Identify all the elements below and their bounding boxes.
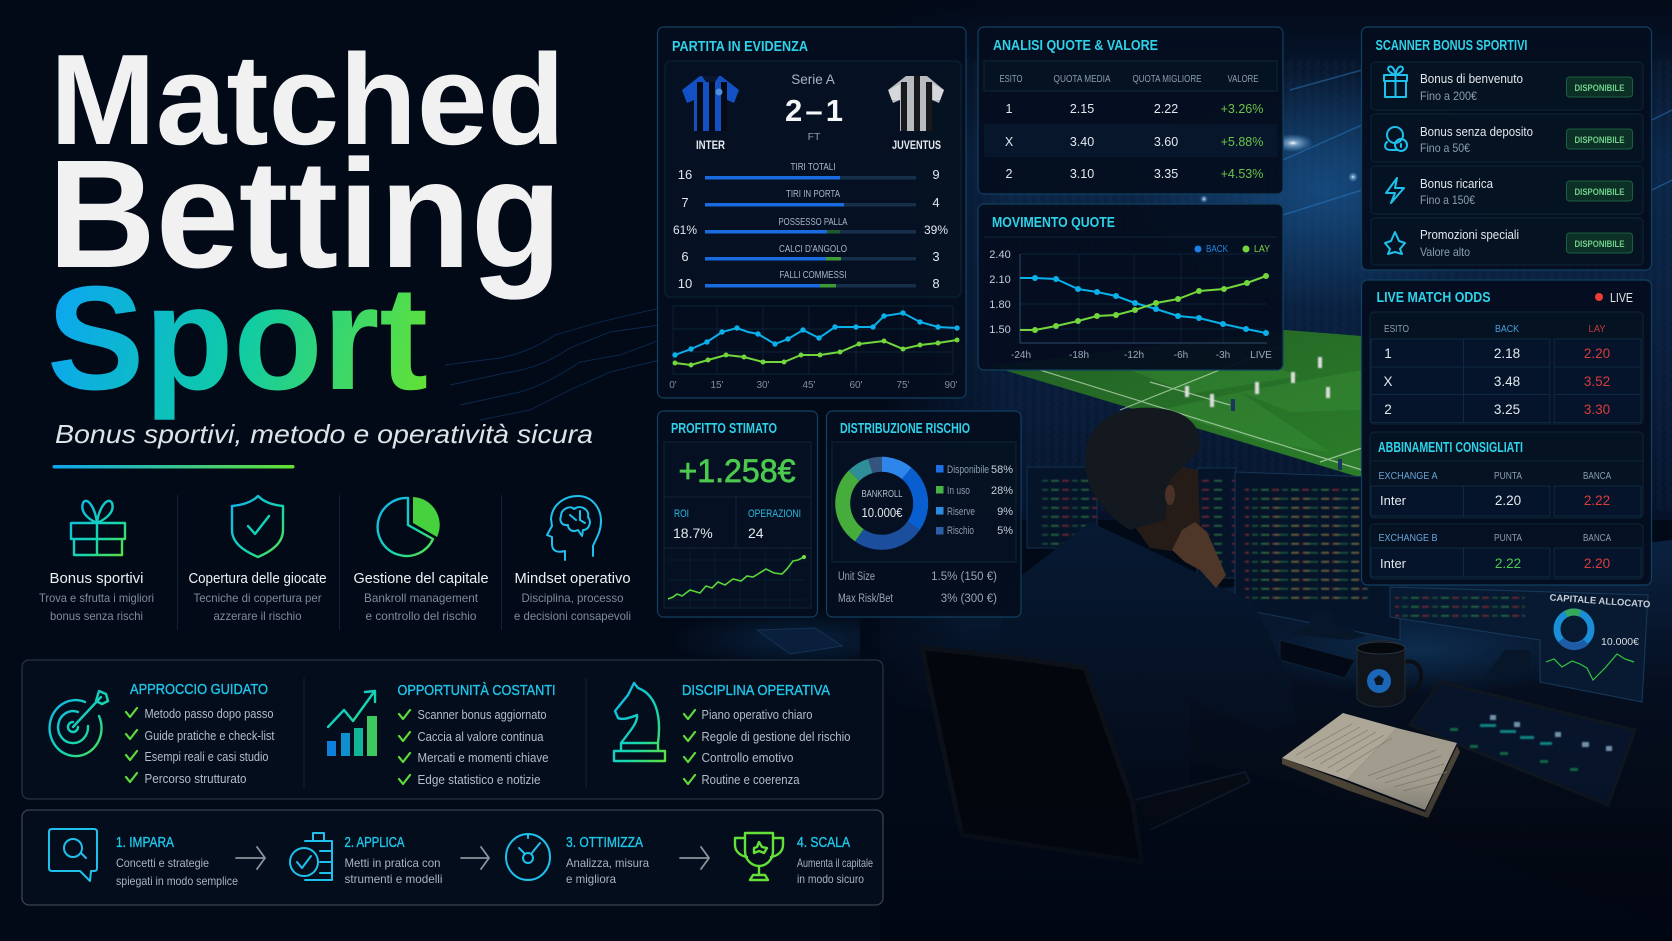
line chart: match trend: 45' — [802, 380, 816, 391]
bonus row 1 — [1371, 62, 1643, 110]
odds table: BACK — [1495, 323, 1519, 335]
bonus row 2: Fino a 50€ — [1420, 141, 1470, 155]
feature: mindset: e decisioni consapevoli — [514, 609, 631, 623]
line chart: odds movement: -18h — [1069, 350, 1089, 361]
abbinamenti consigliati: PUNTA — [1494, 532, 1522, 544]
risk legend: 58% — [991, 464, 1013, 476]
match stats: 9 — [932, 167, 940, 182]
score: 2 – 1 — [785, 93, 843, 128]
panel: movimento quote — [978, 204, 1283, 370]
feature: gestione capitale: e controllo del rischio — [366, 609, 477, 623]
abbinamenti consigliati: 2.22 — [1584, 493, 1610, 508]
panel: analisi quote e valore: ANALISI QUOTE & VALORE — [993, 38, 1158, 54]
risk legend — [936, 464, 1013, 537]
abbinamenti consigliati: ABBINAMENTI CONSIGLIATI — [1378, 440, 1523, 456]
bonus row 3: DISPONIBILE — [1574, 187, 1624, 198]
feature: copertura: Tecniche di copertura per — [194, 591, 322, 605]
step 4: 4. SCALA — [797, 835, 850, 851]
bonus row 1: Bonus di benvenuto — [1420, 71, 1523, 86]
shirt: Juventus — [886, 76, 946, 132]
icon: search bubble — [49, 829, 97, 881]
stadium backdrop — [880, 0, 1672, 520]
step 1: Concetti e strategie — [116, 856, 209, 870]
odds table: ESITO — [1384, 323, 1409, 335]
odds table: 3.52 — [1584, 374, 1610, 389]
panel: scanner bonus sportivi — [1362, 27, 1652, 270]
panel: live match odds — [1362, 280, 1652, 585]
risk legend: 9% — [997, 506, 1013, 518]
risk legend: In uso — [947, 485, 970, 497]
feature: copertura: Copertura delle giocate — [188, 570, 326, 587]
legend: BACK — [1206, 244, 1228, 255]
panel: distribuzione rischio: Max Risk/Bet — [838, 593, 894, 605]
abbinamenti consigliati: PUNTA — [1494, 470, 1522, 482]
football pitch — [990, 330, 1362, 478]
icon: clock gauge — [506, 834, 550, 880]
title — [47, 28, 565, 421]
match stats: 3 — [932, 249, 940, 264]
panel: profitto stimato — [658, 411, 818, 617]
icon: lightning bolt — [1386, 178, 1404, 203]
panel: analisi quote e valore: 2 — [1006, 167, 1013, 181]
odds table: 2 — [1384, 402, 1392, 417]
panel: distribuzione rischio: 10.000€ — [862, 505, 903, 520]
icon: chess knight — [614, 683, 665, 761]
bonus row 4: Valore alto — [1420, 245, 1470, 259]
desk — [880, 540, 1672, 930]
line chart: match trend: 0' — [669, 380, 677, 391]
panel: distribuzione rischio: 1.5% (150 €) — [931, 571, 997, 583]
icon: star — [1385, 232, 1405, 254]
feature: gestione capitale: Bankroll management — [364, 591, 479, 605]
panel: analisi quote e valore: QUOTA MIGLIORE — [1132, 74, 1202, 85]
benefit: approccio guidato: APPROCCIO GUIDATO — [130, 682, 268, 698]
match stats: TIRI IN PORTA — [786, 188, 840, 200]
gradient underline — [52, 465, 294, 468]
panel: distribuzione rischio: BANKROLL — [862, 489, 903, 500]
step 4: Aumenta il capitale — [797, 856, 873, 870]
line chart: odds movement — [989, 249, 1272, 361]
panel: analisi quote e valore: VALORE — [1228, 74, 1259, 85]
benefit: opportunita costanti: Scanner bonus aggiornato — [418, 708, 547, 722]
panel: partita in evidenza: FT — [808, 131, 821, 143]
match stats: 10 — [678, 276, 692, 291]
panel: steps — [22, 810, 883, 905]
abbinamenti consigliati: 2.20 — [1584, 556, 1610, 571]
panel: analisi quote e valore: +3.26% — [1221, 102, 1263, 116]
bonus row 4: DISPONIBILE — [1574, 239, 1624, 250]
panel: partita in evidenza: PARTITA IN EVIDENZA — [672, 39, 808, 55]
arrow 2 — [461, 847, 489, 869]
abbinamenti consigliati: 2.22 — [1495, 556, 1521, 571]
abbinamenti consigliati: EXCHANGE B — [1378, 532, 1438, 544]
line chart: odds movement: -24h — [1011, 350, 1031, 361]
feature: bonus sportivi — [39, 501, 154, 623]
step 1: spiegati in modo semplice — [116, 874, 238, 888]
match stats: 16 — [678, 167, 692, 182]
title line: Matched: Matched — [50, 28, 565, 172]
panel: distribuzione rischio: DISTRIBUZIONE RISCHIO — [840, 421, 970, 437]
line chart: match trend: 90' — [944, 380, 958, 391]
small allocation screen: CAPITALE ALLOCATO — [1549, 592, 1651, 611]
line chart: odds movement: -6h — [1174, 350, 1188, 361]
shirt: Inter — [680, 76, 740, 132]
panel: scanner bonus sportivi: SCANNER BONUS SPORTIVI — [1376, 38, 1528, 54]
line chart: odds movement: 2.10 — [989, 274, 1011, 286]
step 1: 1. IMPARA — [116, 835, 174, 851]
feature: mindset: Mindset operativo — [514, 570, 630, 587]
panel: distribuzione rischio: Unit Size — [838, 571, 875, 583]
panel: profitto stimato: ROI — [674, 508, 689, 520]
bonus row 3 — [1371, 166, 1643, 214]
match stats: 4 — [932, 195, 940, 210]
person at desk — [998, 408, 1296, 800]
icon: user with coin — [1385, 127, 1407, 151]
benefit: approccio guidato: Guide pratiche e check-list — [144, 729, 275, 743]
panel: analisi quote e valore: QUOTA MEDIA — [1054, 74, 1111, 85]
arrow 1 — [236, 847, 265, 869]
panel: profitto stimato: PROFITTO STIMATO — [671, 421, 777, 437]
profit sparkline — [668, 550, 806, 608]
odds table: 1 — [1384, 346, 1392, 361]
bonus row 2: DISPONIBILE — [1574, 135, 1624, 146]
data network lines — [445, 308, 660, 420]
odds table: 2.20 — [1584, 346, 1610, 361]
odds table: 3.30 — [1584, 402, 1610, 417]
abbinamenti consigliati — [1370, 432, 1643, 579]
abbinamenti consigliati: 2.20 — [1495, 493, 1521, 508]
bottom fade — [880, 780, 1672, 941]
odds table: 3.48 — [1494, 374, 1520, 389]
title line: Betting: Betting — [48, 128, 562, 300]
coffee mug — [1357, 640, 1421, 707]
benefit: opportunita costanti: OPPORTUNITÀ COSTANTI — [398, 682, 556, 699]
bonus row 2 — [1371, 114, 1643, 162]
step 3: 3. OTTIMIZZA — [566, 835, 643, 851]
risk legend: Disponibile — [947, 464, 989, 476]
panel: benefits — [22, 660, 883, 799]
match stats: 8 — [932, 276, 940, 291]
bonus row 3: Bonus ricarica — [1420, 176, 1494, 191]
panel: analisi quote e valore: X — [1005, 135, 1014, 149]
benefit: approccio guidato: Percorso strutturato — [144, 772, 247, 786]
bonus row 3: Fino a 150€ — [1420, 193, 1475, 207]
line chart: odds movement: 1.80 — [989, 299, 1011, 311]
step 2: 2. APPLICA — [344, 835, 405, 851]
benefit: opportunita costanti: Edge statistico e notizie — [418, 773, 541, 787]
risk legend: Riserve — [947, 506, 975, 518]
icon: head with brain — [547, 496, 601, 560]
panel: analisi quote e valore: +5.88% — [1221, 135, 1263, 149]
panel: partita in evidenza — [658, 27, 966, 398]
benefit: disciplina operativa — [614, 683, 851, 787]
panel: analisi quote e valore: +4.53% — [1221, 167, 1263, 181]
line chart: odds movement: 2.40 — [989, 249, 1011, 261]
panel: movimento quote: MOVIMENTO QUOTE — [992, 215, 1115, 231]
step 2: Metti in pratica con — [344, 856, 440, 870]
arrow 3 — [680, 847, 709, 869]
benefit: approccio guidato: Esempi reali e casi studio — [144, 750, 269, 764]
icon: target — [50, 691, 108, 756]
panel: analisi quote e valore: 3.60 — [1154, 135, 1178, 149]
odds table: 3.25 — [1494, 402, 1520, 417]
benefit: disciplina operativa: Routine e coerenza — [702, 773, 800, 787]
match stats: 61% — [673, 223, 697, 237]
icon: trophy — [735, 833, 783, 880]
match stats: CALCI D'ANGOLO — [779, 243, 847, 255]
office chair — [922, 648, 1250, 862]
icon: shield — [232, 496, 283, 557]
abbinamenti consigliati: EXCHANGE A — [1378, 470, 1438, 482]
live indicator: LIVE — [1610, 290, 1633, 305]
benefit: disciplina operativa: Piano operativo chiaro — [702, 708, 813, 722]
tablet — [1410, 682, 1635, 805]
feature: copertura: azzerare il rischio — [214, 609, 302, 623]
odds table: 2.18 — [1494, 346, 1520, 361]
benefit: opportunita costanti — [327, 682, 556, 787]
line chart: odds movement: -3h — [1216, 350, 1230, 361]
panel: profitto stimato: 24 — [748, 525, 764, 541]
match stats: FALLI COMMESSI — [780, 269, 846, 281]
feature: gestione capitale — [354, 497, 488, 623]
risk legend: 28% — [991, 485, 1013, 497]
icon: checklist clipboard — [290, 833, 332, 880]
odds table: X — [1383, 374, 1393, 389]
line chart: odds movement: -12h — [1124, 350, 1144, 361]
abbinamenti consigliati: BANCA — [1583, 470, 1611, 482]
line chart: match trend: 60' — [849, 380, 863, 391]
line chart: match trend: 75' — [896, 380, 910, 391]
benefit: disciplina operativa: Controllo emotivo — [702, 751, 794, 765]
panel: analisi quote e valore: 2.15 — [1070, 102, 1094, 116]
line chart: match trend — [669, 306, 960, 391]
step 3: e migliora — [566, 872, 616, 886]
step 3: Analizza, misura — [566, 856, 649, 870]
match stats: 39% — [924, 223, 948, 237]
benefit: opportunita costanti: Mercati e momenti chiave — [418, 751, 549, 765]
panel: analisi quote e valore: 3.35 — [1154, 167, 1178, 181]
step 2 — [290, 833, 442, 886]
panel: partita in evidenza: Serie A — [791, 72, 835, 87]
panel: live match odds: LIVE MATCH ODDS — [1376, 290, 1491, 306]
feature: bonus sportivi: bonus senza rischi — [50, 609, 143, 623]
odds table — [1370, 312, 1643, 424]
bonus row 4 — [1371, 218, 1643, 265]
title line: Sport: Sport — [47, 256, 428, 421]
step 2: strumenti e modelli — [344, 872, 442, 886]
abbinamenti consigliati: Inter — [1380, 493, 1407, 508]
step 4: in modo sicuro — [797, 872, 864, 886]
risk legend: Rischio — [947, 525, 974, 537]
monitors — [1027, 467, 1648, 702]
feature: mindset — [514, 496, 631, 623]
legend — [1194, 244, 1270, 255]
benefit: disciplina operativa: DISCIPLINA OPERATIVA — [682, 683, 830, 699]
risk legend: 5% — [997, 525, 1013, 537]
match stats — [673, 161, 948, 291]
benefit: disciplina operativa: Regole di gestione del rischio — [702, 730, 851, 744]
tagline: Bonus sportivi, metodo e operatività sicura — [55, 419, 593, 449]
step 4 — [735, 833, 873, 886]
feature: bonus sportivi: Bonus sportivi — [50, 570, 144, 587]
legend: LAY — [1254, 244, 1270, 255]
abbinamenti consigliati: BANCA — [1583, 532, 1611, 544]
panel: distribuzione rischio: 3% (300 €) — [941, 593, 997, 605]
abbinamenti consigliati: Inter — [1380, 556, 1407, 571]
match stats: 6 — [681, 249, 689, 264]
panel: analisi quote e valore: 3.10 — [1070, 167, 1094, 181]
icon: gift — [71, 501, 125, 555]
benefit: opportunita costanti: Caccia al valore continua — [418, 730, 544, 744]
panel: analisi quote e valore: 1 — [1006, 102, 1013, 116]
panel: partita in evidenza: INTER — [696, 138, 725, 152]
small allocation screen — [1546, 592, 1651, 680]
donut chart: bankroll — [843, 464, 921, 542]
bonus row 2: Bonus senza deposito — [1420, 124, 1533, 139]
match stats: TIRI TOTALI — [790, 161, 836, 173]
panel: analisi quote e valore — [978, 27, 1283, 194]
icon: gift — [1384, 67, 1407, 97]
live indicator — [1595, 290, 1633, 305]
open notebook — [1282, 713, 1460, 818]
line chart: odds movement: 1.50 — [989, 324, 1011, 336]
panel: analisi quote e valore: ESITO — [1000, 74, 1023, 85]
panel: analisi quote e valore: 2.22 — [1154, 102, 1178, 116]
icon: pie chart — [378, 497, 440, 556]
profit value: +1.258€ — [678, 453, 796, 489]
line chart: odds movement: LIVE — [1250, 350, 1272, 361]
line chart: match trend: 30' — [756, 380, 770, 391]
icon: rising bar chart — [327, 691, 377, 756]
step 3 — [506, 834, 649, 886]
small allocation screen: 10.000€ — [1601, 636, 1639, 648]
benefit: approccio guidato: Metodo passo dopo passo — [144, 707, 274, 721]
benefit: approccio guidato — [50, 682, 275, 786]
feature: gestione capitale: Gestione del capitale — [354, 570, 488, 587]
feature: mindset: Disciplina, processo — [522, 591, 624, 605]
feature row — [39, 495, 631, 630]
line chart: match trend: 15' — [710, 380, 724, 391]
panel: distribuzione rischio — [826, 411, 1021, 617]
phone on the desk — [757, 628, 842, 654]
feature: copertura — [188, 496, 326, 623]
odds table: LAY — [1588, 323, 1606, 335]
step 1 — [49, 829, 238, 888]
bonus row 1: Fino a 200€ — [1420, 89, 1477, 103]
match stats: POSSESSO PALLA — [778, 216, 848, 228]
panel: profitto stimato: OPERAZIONI — [748, 508, 801, 520]
bonus row 1: DISPONIBILE — [1574, 83, 1624, 94]
panel: partita in evidenza: JUVENTUS — [892, 138, 941, 152]
match stats: 7 — [681, 195, 689, 210]
feature: bonus sportivi: Trova e sfrutta i migliori — [39, 591, 154, 605]
panel: analisi quote e valore: 3.40 — [1070, 135, 1094, 149]
bonus row 4: Promozioni speciali — [1420, 227, 1519, 242]
panel: profitto stimato: 18.7% — [673, 525, 713, 541]
